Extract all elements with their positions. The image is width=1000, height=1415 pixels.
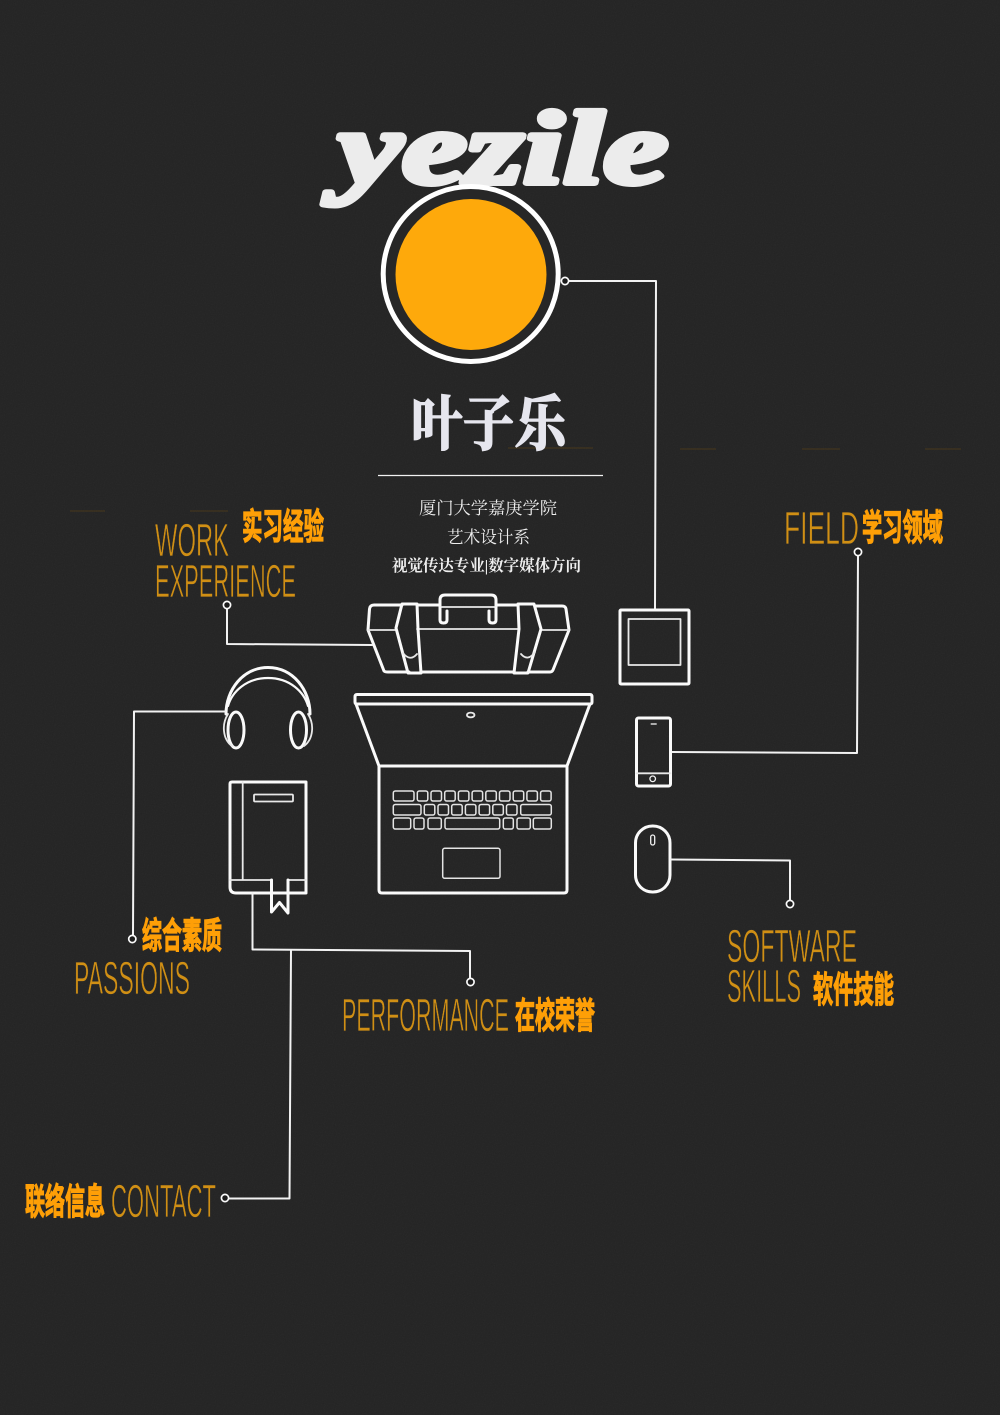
school info: 艺术设计系 bbox=[447, 528, 530, 547]
label: work experience: WORK bbox=[155, 514, 229, 566]
connector: field bbox=[672, 548, 862, 753]
label: contact: 联络信息 bbox=[25, 1181, 105, 1222]
connector: passions bbox=[129, 712, 225, 943]
label: software skills: 软件技能 bbox=[813, 969, 894, 1010]
connector: software skills bbox=[671, 860, 794, 908]
icon: headphones bbox=[224, 668, 312, 748]
label: work experience bbox=[155, 506, 324, 607]
label: work experience: EXPERIENCE bbox=[155, 555, 296, 607]
connector: work experience bbox=[223, 601, 372, 645]
logo: yezile: yezile bbox=[323, 91, 668, 206]
label: software skills: SKILLS bbox=[727, 960, 801, 1012]
school info: 视觉传达专业|数字媒体方向 bbox=[392, 556, 581, 575]
text: CONTACT bbox=[111, 1175, 216, 1227]
school info: 厦门大学嘉庚学院 bbox=[419, 499, 557, 518]
label: passions: 综合素质 bbox=[142, 915, 222, 956]
label: performance: 在校荣誉 bbox=[515, 995, 595, 1036]
icon: notebook bbox=[230, 782, 306, 913]
label: passions bbox=[74, 915, 222, 1004]
label: software skills: SOFTWARE bbox=[727, 920, 857, 972]
label: field: FIELD bbox=[784, 502, 859, 554]
icon: briefcase bbox=[368, 595, 569, 673]
connector: performance and contact bbox=[221, 893, 474, 1202]
label: passions: PASSIONS bbox=[74, 952, 190, 1004]
name divider bbox=[378, 474, 603, 476]
icon: laptop bbox=[355, 694, 592, 893]
connector: portrait to tablet bbox=[561, 277, 656, 609]
label: work experience: 实习经验 bbox=[242, 506, 324, 547]
keyboard bbox=[393, 791, 551, 829]
label: software skills bbox=[727, 920, 894, 1012]
school info bbox=[392, 499, 581, 575]
label: contact bbox=[25, 1175, 216, 1227]
portrait circle bbox=[383, 186, 558, 362]
icon: mouse bbox=[636, 826, 670, 892]
name: 叶子乐 bbox=[411, 392, 570, 458]
label: performance: PERFORMANCE bbox=[342, 989, 509, 1041]
icon: tablet bbox=[620, 610, 689, 684]
icon: phone bbox=[636, 718, 670, 786]
